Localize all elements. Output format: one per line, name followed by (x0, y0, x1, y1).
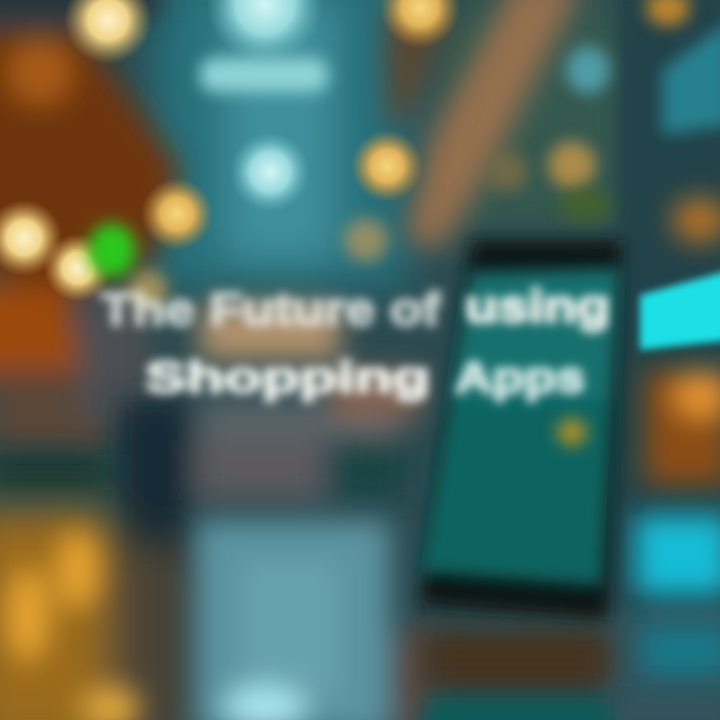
panel: right lower cyan signs (635, 515, 720, 675)
panel: smartphone (420, 240, 622, 720)
panel: warm brown left wall (0, 0, 180, 450)
title: blurred heading text: The Future of (100, 283, 441, 335)
panel: dark lower band (0, 400, 405, 570)
title: blurred heading text: Shopping (145, 353, 430, 402)
pale ceiling lights (200, 0, 610, 212)
warm glow behind title (200, 305, 420, 420)
panel: right dark column (600, 0, 720, 720)
phone screen dot (557, 418, 587, 446)
title: blurred heading text: using (465, 280, 610, 332)
panel: amber lower left floor (0, 510, 190, 720)
warm strip under phone (425, 632, 610, 687)
phone body (420, 240, 622, 620)
panel: top right teal sign (646, 0, 720, 135)
title: blurred heading text (100, 280, 610, 402)
panel: right cyan sign (640, 270, 720, 350)
panel: brown diagonal column (385, 0, 585, 250)
panel: teal atrium background (150, 0, 630, 290)
bokeh lights (0, 0, 611, 310)
panel: pale blue floor reflection (195, 520, 430, 720)
phone screen (420, 268, 620, 586)
panel: right orange sign (645, 198, 720, 485)
title: blurred heading text: Apps (455, 353, 585, 402)
teal strip at bottom (425, 698, 610, 720)
